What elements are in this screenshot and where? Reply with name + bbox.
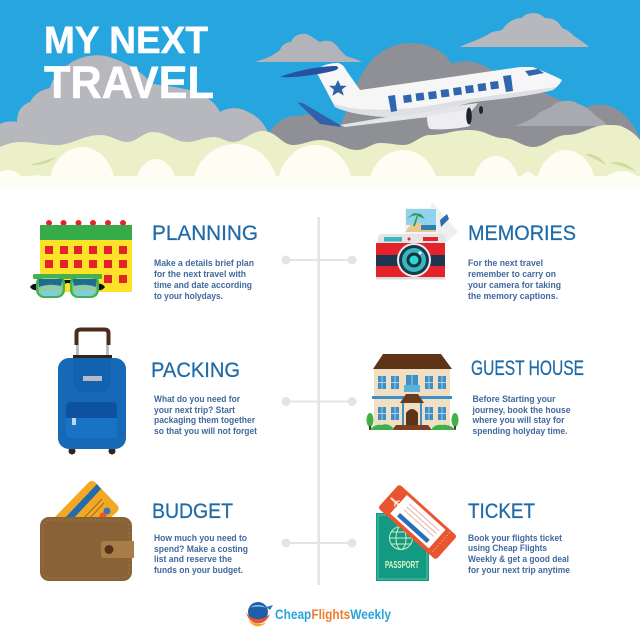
text: packing: packaging them together (154, 415, 255, 425)
cloud: small top right (460, 13, 589, 47)
title (44, 20, 214, 108)
text: ticket: using Cheap Flights (468, 543, 547, 553)
heading: budget: BUDGET (152, 499, 233, 523)
text: memories: remember to carry on (468, 269, 556, 279)
text: packing (154, 394, 257, 436)
text: budget: spend? Make a costing (154, 544, 248, 554)
icon: passport and ticket: PASSPORT (385, 559, 419, 571)
header banner (0, 0, 640, 241)
text: budget: list and reserve the (154, 554, 232, 564)
cloud: small top left (255, 34, 362, 62)
text: planning (154, 258, 254, 301)
heading: memories: MEMORIES (468, 221, 576, 245)
text: planning: time and date according (154, 280, 252, 290)
icon: passport and ticket (376, 484, 457, 581)
text: guest house: spending holyday time. (472, 426, 568, 436)
panel: packing (58, 330, 257, 454)
panel: memories (376, 202, 576, 301)
title: TRAVEL (44, 57, 214, 108)
heading: packing: PACKING (151, 358, 240, 382)
icon: wallet and card (40, 481, 134, 581)
icon: calendar and sunglasses (30, 220, 132, 298)
text: ticket: Book your flights ticket (468, 533, 562, 543)
cloud: pale yellow layer (0, 125, 640, 190)
icon: camera and photos (376, 202, 458, 280)
heading: planning: PLANNING (152, 221, 258, 245)
cloud: dark gray back (262, 43, 640, 160)
timeline (282, 217, 356, 585)
panel: budget (40, 481, 248, 581)
text: planning: to your holydays. (154, 291, 223, 301)
cloud: small lower right (515, 101, 608, 126)
icon: house (366, 354, 458, 430)
text: guest house: where you will stay for (472, 415, 565, 425)
text: budget: funds on your budget. (154, 565, 243, 575)
text: memories: your camera for taking (468, 280, 561, 290)
title: MY NEXT (44, 20, 208, 62)
panel: guest house (366, 354, 584, 436)
panel: ticket (376, 484, 570, 581)
text: packing: so that you will not forget (154, 426, 257, 436)
text: memories (468, 258, 561, 301)
panel: planning (30, 220, 258, 301)
cloud: white front bumps (0, 144, 640, 236)
icon: tail star (329, 80, 347, 96)
text: packing: your next trip? Start (154, 405, 235, 415)
text: ticket: for your next trip anytime (468, 565, 570, 575)
cloud: light gray left (0, 55, 268, 160)
heading: guest house: GUEST HOUSE (471, 356, 584, 380)
text: logo wordmark: CheapFlightsWeekly (275, 607, 391, 622)
text: budget: How much you need to (154, 533, 247, 543)
text: memories: the memory captions. (468, 291, 558, 301)
text: packing: What do you need for (154, 394, 240, 404)
text: guest house: Before Starting your (472, 394, 556, 404)
text: memories: For the next travel (468, 258, 543, 268)
text: guest house (472, 394, 570, 436)
icon: globe (246, 602, 273, 626)
text: ticket (468, 533, 570, 575)
text: ticket: Weekly & get a good deal (468, 554, 569, 564)
cloud: pale green shading (30, 154, 636, 172)
heading: ticket: TICKET (468, 499, 535, 523)
text: guest house: journey, book the house (472, 405, 570, 415)
text: planning: for the next travel with (154, 269, 246, 279)
text: planning: Make a details brief plan (154, 258, 254, 268)
airplane (280, 63, 562, 129)
icon: suitcase (58, 330, 126, 454)
text: budget (154, 533, 248, 575)
logo: Cheap Flights Weekly (246, 602, 391, 626)
